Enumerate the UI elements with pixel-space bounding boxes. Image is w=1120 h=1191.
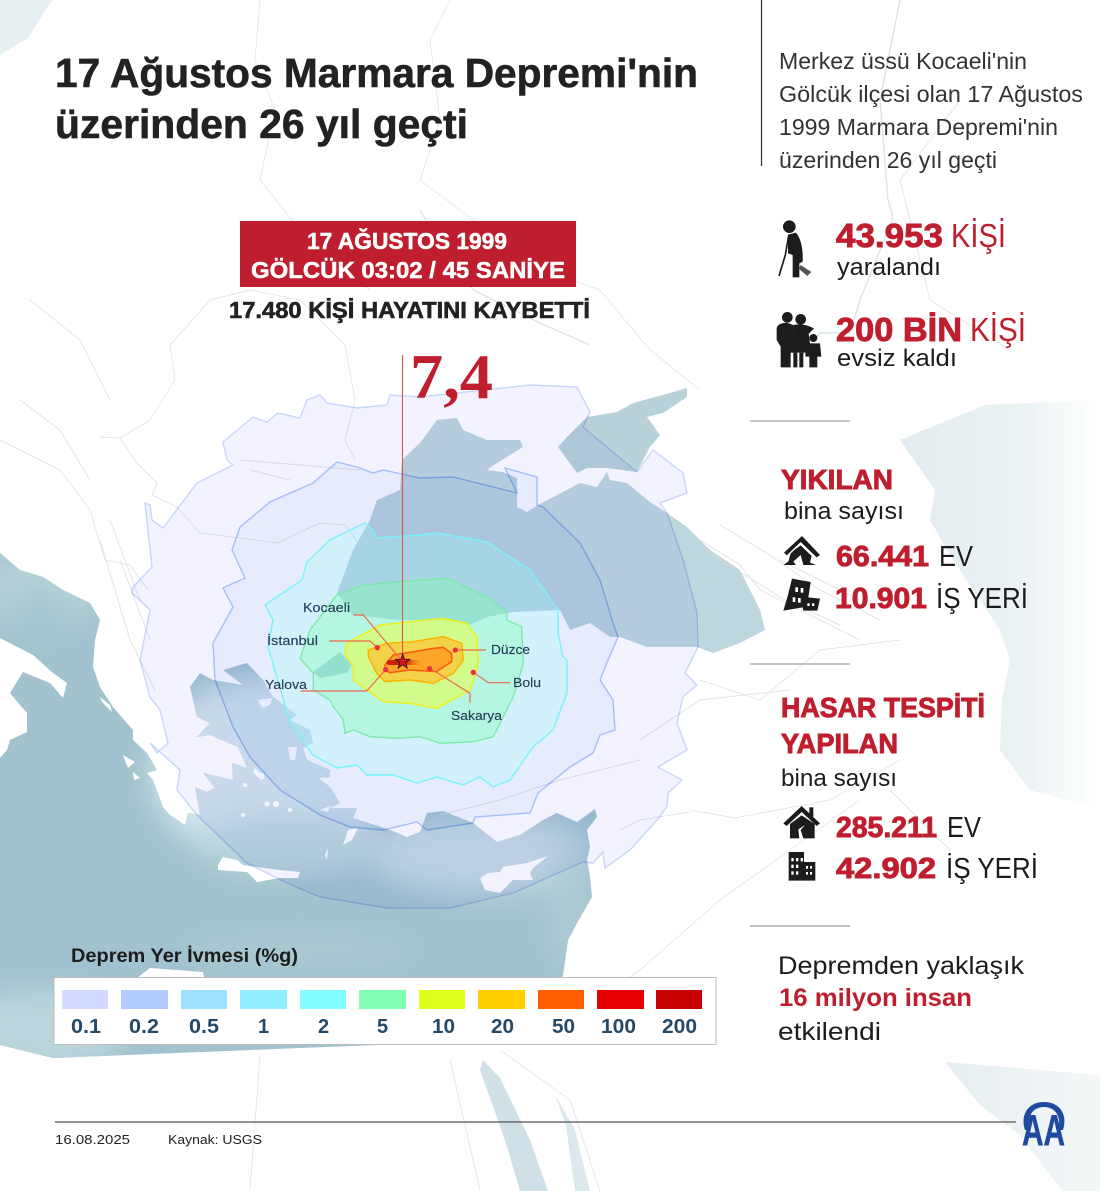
panel: assessed buildings: bina sayısı: [781, 765, 897, 792]
contour: 0.1 %g: [132, 385, 698, 908]
stat: injured: KİŞİ: [951, 217, 1006, 254]
legend: 20: [491, 1016, 514, 1038]
legend: 10: [432, 1016, 455, 1038]
panel: destroyed buildings: 66.441: [836, 541, 929, 573]
shake map: [132, 385, 698, 908]
icon: family: [777, 312, 821, 367]
stat: injured: 43.953: [836, 217, 943, 254]
stat: injured: [779, 217, 1006, 281]
city labels: Bolu: [513, 675, 541, 690]
icon: AA logo: AA: [1022, 1106, 1065, 1155]
islands: [100, 697, 548, 893]
stat: homeless: [777, 311, 1026, 372]
panel: assessed buildings: İŞ YERİ: [946, 852, 1038, 885]
stat: homeless: KİŞİ: [970, 311, 1026, 348]
icon: injured person: [779, 220, 811, 277]
contour: 0.5-2 %g: [265, 523, 567, 787]
panel: affected people: 16 milyon insan: [779, 984, 972, 1012]
panel: assessed buildings: EV: [947, 812, 982, 844]
sea: Mediterranean: [0, 545, 597, 1070]
sea: Black Sea: [337, 418, 765, 653]
panel: affected people: etkilendi: [778, 1018, 881, 1046]
intro text: Merkez üssü Kocaeli'nin: [779, 48, 1027, 74]
sea: Persian Gulf: [945, 1062, 1100, 1191]
legend: 1: [258, 1016, 269, 1038]
contour: 50 %g: [385, 647, 452, 673]
sea: Red Sea: [480, 1060, 548, 1191]
legend: 0.5: [189, 1016, 219, 1038]
panel: affected people: Depremden yaklaşık: [778, 952, 1025, 980]
stat: homeless: 200 BİN: [836, 311, 962, 348]
icon: collapsed house: [783, 536, 820, 565]
legend: [54, 978, 716, 1044]
legend: 200: [662, 1016, 697, 1038]
land: Italy: [0, 638, 67, 758]
city labels: Düzce: [491, 642, 530, 657]
city markers and leader lines: [301, 615, 510, 703]
title: üzerinden 26 yıl geçti: [55, 101, 468, 147]
contour: 0.2 %g: [213, 462, 618, 830]
sea: top-left corner: [0, 0, 52, 55]
intro text: üzerinden 26 yıl geçti: [779, 147, 997, 173]
legend title: Deprem Yer İvmesi (%g): [71, 946, 298, 967]
footer: Kaynak: USGS: [168, 1132, 262, 1147]
magnitude: 7,4: [410, 341, 493, 412]
legend: 5: [377, 1016, 388, 1038]
panel: assessed buildings: 285.211: [836, 812, 937, 844]
footer: 16.08.2025: [55, 1132, 130, 1147]
sea: Caspian: [900, 400, 1100, 810]
contour: 5 %g: [300, 578, 523, 743]
icon: collapsed building: [783, 579, 820, 611]
legend: 0.2: [129, 1016, 159, 1038]
panel: assessed buildings: YAPILAN: [781, 728, 898, 759]
date and duration box: [240, 221, 576, 287]
date and duration box: GÖLCÜK 03:02 / 45 SANİYE: [251, 257, 565, 283]
relief texture: [20, 300, 950, 850]
legend: 0.1: [71, 1016, 101, 1038]
city labels: Sakarya: [451, 708, 503, 723]
legend: 100: [601, 1016, 636, 1038]
land: Libya coast: [119, 968, 207, 992]
heading: destroyed: YIKILAN: [781, 464, 893, 495]
contour: 20 %g: [368, 637, 463, 683]
stat: injured: yaralandı: [837, 254, 941, 281]
city labels: İstanbul: [267, 633, 318, 648]
rupture streak: [387, 660, 422, 665]
title: 17 Ağustos Marmara Depremi'nin: [55, 50, 698, 96]
intro text: 1999 Marmara Depremi'nin: [779, 114, 1058, 140]
panel: destroyed buildings: İŞ YERİ: [936, 582, 1028, 615]
intro text: Gölcük ilçesi olan 17 Ağustos: [779, 81, 1083, 107]
panel: destroyed buildings: 10.901: [835, 583, 927, 615]
sea: Azov: [558, 388, 687, 473]
icon: office building: [789, 852, 815, 881]
panel: affected people: [778, 952, 1025, 1046]
panel: destroyed buildings: EV: [939, 541, 974, 573]
panel: assessed buildings: [781, 692, 1038, 885]
death toll: 17.480 KİŞİ HAYATINI KAYBETTİ: [229, 297, 590, 323]
sea: Marmara: [313, 652, 352, 678]
intro text: [762, 0, 1083, 173]
panel: destroyed buildings: [781, 464, 1028, 615]
stat: homeless: evsiz kaldı: [837, 345, 957, 372]
rivers: [420, 0, 900, 367]
title: [55, 50, 698, 147]
legend: 2: [318, 1016, 329, 1038]
footer: [55, 1122, 1016, 1147]
date and duration box: 17 AĞUSTOS 1999: [307, 227, 507, 254]
panel: destroyed buildings: bina sayısı: [784, 498, 904, 525]
city labels: Kocaeli: [303, 600, 350, 615]
heading: assessed: HASAR TESPİTİ: [781, 692, 985, 723]
icon: AA logo: [1022, 1102, 1065, 1155]
icon: house: [783, 806, 820, 838]
legend: 50: [552, 1016, 575, 1038]
contour: 10 %g: [345, 618, 478, 708]
panel: assessed buildings: 42.902: [836, 853, 936, 885]
icon: epicentre star: [395, 654, 410, 668]
city labels: [265, 600, 541, 723]
city labels: Yalova: [265, 677, 308, 692]
epicentre leader line: [402, 355, 404, 660]
